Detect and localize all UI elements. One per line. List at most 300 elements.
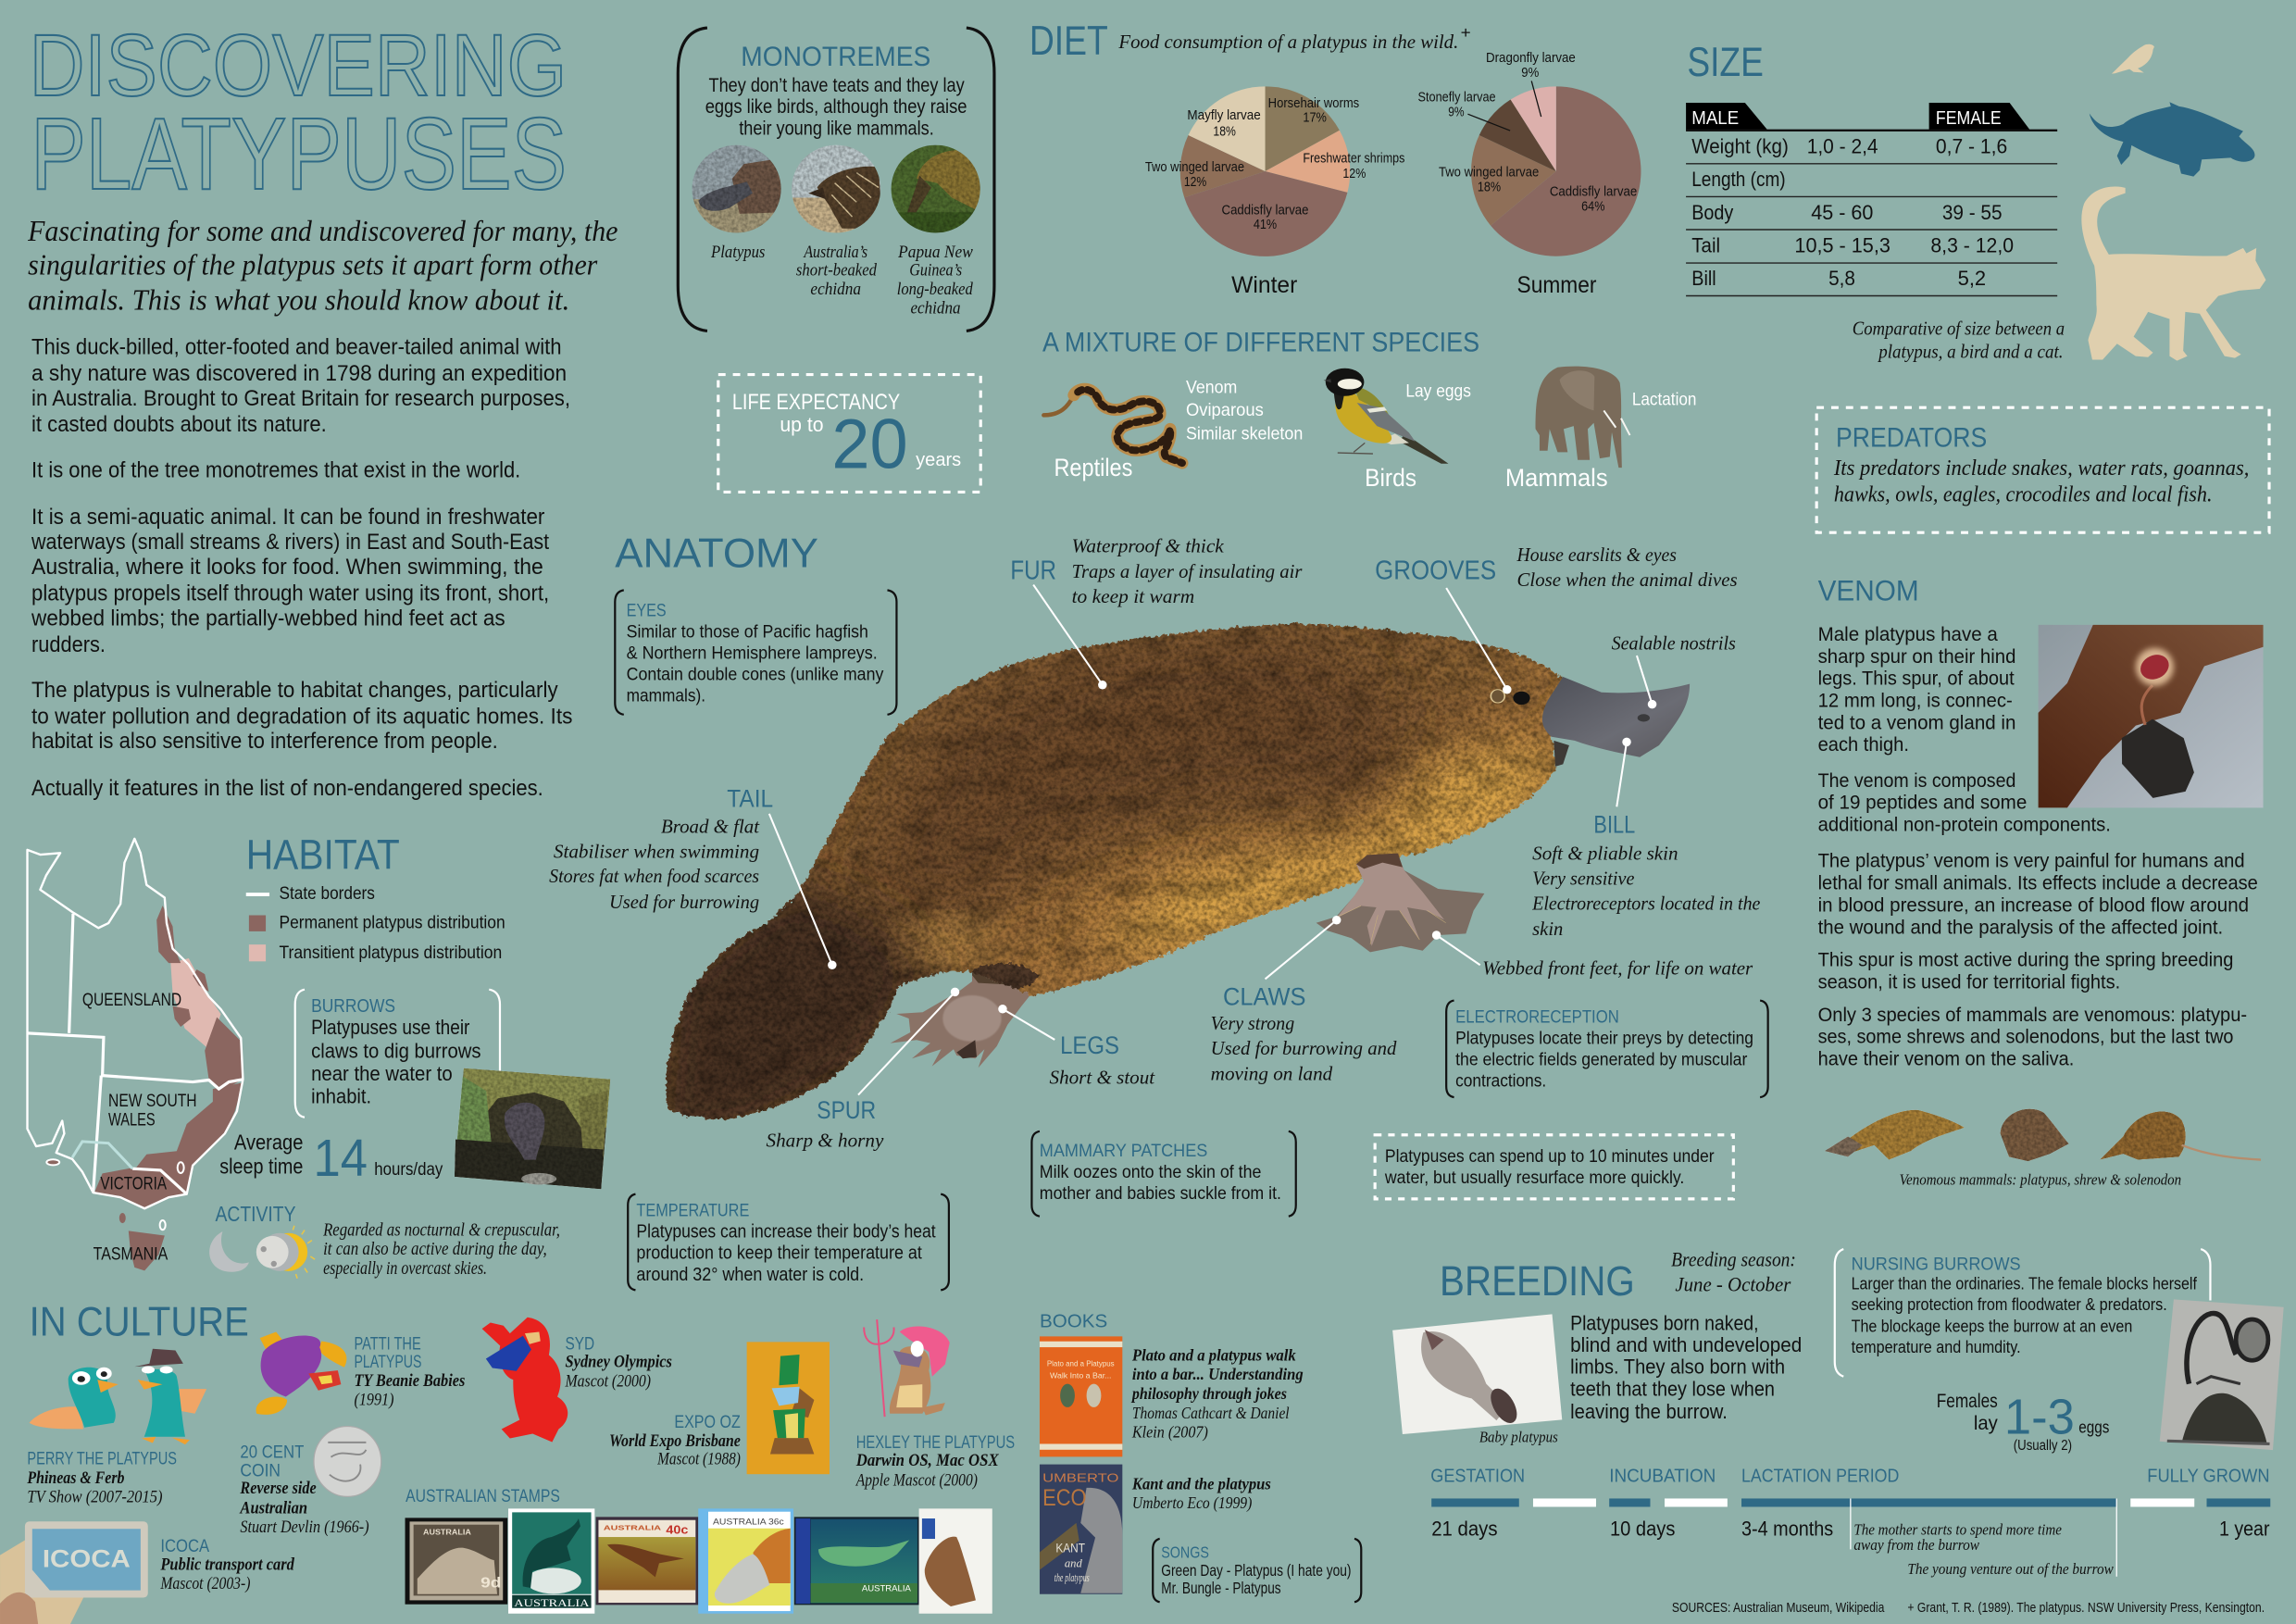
callout: predators: hawks, owls, eagles, crocodiles and local fish. — [1834, 482, 2213, 507]
pie chart: winter: 18% — [1213, 123, 1236, 139]
species: mammals: Lactation — [1632, 390, 1696, 409]
panel: venom: Only 3 species of mammals are venomous: platypu- — [1818, 1004, 2247, 1026]
illustration: venom gland and spur — [2039, 625, 2264, 807]
pie chart: winter: 17% — [1303, 109, 1327, 125]
body text: introduction: This duck-billed, otter-footed and beaver-tailed animal with — [31, 336, 562, 360]
engraving: platypus burrow — [2160, 1299, 2284, 1450]
timeline: reproduction stages: GESTATION — [1430, 1466, 1525, 1487]
pie chart: winter: Horsehair worms — [1268, 95, 1359, 111]
species captions: long-beaked — [897, 280, 973, 299]
map legend: Permanent platypus distribution — [279, 912, 505, 932]
panel: songs — [1153, 1539, 1361, 1602]
pie chart: winter: Caddisfly larvae — [1222, 202, 1309, 218]
map of eastern Australia: QUEENSLAND — [82, 991, 181, 1010]
label: legs: Short & stout — [1050, 1068, 1155, 1089]
pie chart: winter: Mayfly larvae — [1187, 107, 1261, 123]
text: breeding description: blind and with undeveloped — [1570, 1333, 1802, 1356]
panel: venom: legs. This spur, of about — [1818, 668, 2015, 690]
body text: introduction: waterways (small streams & rivers) in East and South-East — [31, 531, 549, 555]
map of eastern Australia — [28, 839, 243, 1270]
photo: platypus — [692, 145, 782, 232]
body text: introduction — [31, 336, 572, 801]
panel: eyes: Contain double cones (unlike many — [627, 664, 883, 684]
body text: introduction: It is one of the tree monotremes that exist in the world. — [31, 459, 520, 483]
culture: expo oz — [609, 1342, 830, 1474]
text: breeding description: limbs. They also born with — [1570, 1355, 1785, 1379]
intro text: singularities of the platypus sets it apart form other — [28, 249, 598, 281]
heading: breeding: Breeding season: — [1671, 1247, 1796, 1270]
book cover: kant and the platypus: KANT — [1055, 1542, 1085, 1556]
species: reptiles: Reptiles — [1054, 454, 1132, 481]
pie chart: summer: Two winged larvae — [1439, 164, 1539, 180]
species captions: short-beaked — [796, 260, 877, 280]
culture: expo oz: Mascot (1988) — [656, 1450, 741, 1469]
stat: eggs: eggs — [2078, 1418, 2109, 1436]
photo: baby platypus — [1392, 1314, 1562, 1445]
table: size: Weight (kg) — [1691, 134, 1789, 157]
timeline: reproduction stages: away from the burrow — [1853, 1536, 1979, 1554]
panel: nursing burrows: The blockage keeps the burrow at an even — [1852, 1317, 2132, 1335]
panel: venom: VENOM — [1818, 573, 1919, 606]
stamp 4 — [698, 1508, 793, 1614]
books: BOOKS — [1040, 1310, 1107, 1331]
culture: syd: Sydney Olympics — [566, 1353, 672, 1372]
stamp 5 — [794, 1517, 919, 1605]
icon: solenodon — [2100, 1111, 2186, 1160]
label: tail: Used for burrowing — [609, 893, 759, 913]
culture: perry the platypus: TV Show (2007-2015) — [27, 1488, 163, 1507]
panel: monotremes: their young like mammals. — [739, 118, 934, 140]
australian stamps: AUSTRALIAN STAMPS — [406, 1487, 560, 1506]
label: claws — [1211, 916, 1397, 1084]
books: Plato and a platypus walk — [1131, 1345, 1296, 1364]
stat: sleep time: sleep time — [219, 1154, 303, 1178]
silhouette: cat — [2081, 187, 2265, 361]
panel: eyes — [615, 590, 896, 715]
panel: mammary patches: MAMMARY PATCHES — [1040, 1142, 1207, 1161]
diet heading: DIET — [1029, 19, 1108, 64]
books: Kant and the platypus — [1131, 1474, 1271, 1493]
books: Umberto Eco (1999) — [1132, 1493, 1252, 1513]
culture: icoca card: Public transport card — [159, 1555, 294, 1574]
stamp 5: AUSTRALIA — [862, 1583, 911, 1593]
culture: patti the platypus: PATTI THE — [354, 1333, 421, 1354]
pie chart: winter: 12% — [1342, 166, 1366, 181]
stamp 1: AUSTRALIA — [423, 1528, 471, 1537]
book cover: kant and the platypus — [1040, 1465, 1122, 1594]
stat: sleep time: hours/day — [374, 1160, 443, 1180]
books — [1040, 1310, 1304, 1594]
body text: introduction: it casted doubts about its nature. — [31, 413, 327, 437]
culture: hexley the platypus: Apple Mascot (2000) — [855, 1471, 978, 1491]
panel: venom: 12 mm long, is connec- — [1818, 689, 2013, 711]
culture: 20 cent coin — [240, 1426, 381, 1537]
callout: life expectancy: up to — [780, 413, 824, 436]
culture: patti the platypus: (1991) — [354, 1391, 393, 1410]
stamp 2: AUSTRALIA — [514, 1596, 590, 1609]
panel: nursing burrows: seeking protection from floodwater & predators. — [1852, 1295, 2167, 1314]
body text: introduction: The platypus is vulnerable to habitat changes, particularly — [31, 679, 558, 703]
text: breeding description: teeth that they lose when — [1570, 1377, 1775, 1400]
panel: mammary patches: Milk oozes onto the skin of the — [1040, 1162, 1261, 1182]
intro text: animals. This is what you should know about it. — [28, 283, 569, 316]
label: tail: Broad & flat — [661, 817, 760, 837]
label: claws: moving on land — [1211, 1064, 1333, 1084]
timeline: reproduction stages: 21 days — [1431, 1517, 1498, 1540]
label: bill: skin — [1532, 919, 1563, 940]
label: tail — [549, 784, 837, 969]
callout: diving time: Platypuses can spend up to 10 minutes under — [1385, 1146, 1715, 1167]
panel: venom — [1818, 573, 2258, 1070]
label: fur: to keep it warm — [1072, 587, 1194, 607]
label: sealable nostrils: Sealable nostrils — [1612, 633, 1736, 654]
panel: nursing burrows — [1835, 1249, 2210, 1377]
panel: temperature: Platypuses can increase their body’s heat — [636, 1220, 936, 1242]
timeline: reproduction stages: 3-4 months — [1741, 1517, 1833, 1540]
culture: syd: Mascot (2000) — [565, 1371, 651, 1391]
label: webbed front feet — [1432, 931, 1753, 979]
heading: size: SIZE — [1687, 40, 1764, 85]
panel: eyes: Similar to those of Pacific hagfish — [627, 622, 868, 643]
icon: small platypus — [1825, 1110, 1965, 1160]
table: size: 5,8 — [1828, 267, 1855, 290]
icon: shrew — [2000, 1109, 2069, 1161]
map of eastern Australia: NEW SOUTH — [108, 1092, 197, 1111]
label: tail: TAIL — [727, 784, 773, 812]
table: size: MALE — [1691, 107, 1739, 129]
body text: introduction: habitat is also sensitive to interference from people. — [31, 730, 498, 754]
table: size: 1,0 - 2,4 — [1807, 134, 1878, 157]
timeline: reproduction stages: The young venture out of the burrow — [1907, 1560, 2114, 1578]
body text: introduction: It is a semi-aquatic animal. It can be found in freshwater — [31, 506, 544, 530]
panel: eyes: mammals). — [627, 686, 705, 706]
label: spur: Sharp & horny — [767, 1131, 884, 1152]
stamp 1 — [406, 1518, 507, 1605]
icon: sun and moon — [256, 1226, 315, 1279]
pie chart: summer: Caddisfly larvae — [1550, 183, 1637, 199]
sources: SOURCES: Australian Museum, Wikipedia — [1672, 1600, 1885, 1616]
heading: a mixture of different species: A MIXTURE OF DIFFERENT SPECIES — [1042, 328, 1479, 358]
panel: venom: the wound and the paralysis of the affected joint. — [1818, 916, 2223, 938]
culture: expo oz: World Expo Brisbane — [609, 1431, 741, 1451]
panel: electroreception: Platypuses locate their preys by detecting — [1455, 1028, 1753, 1048]
text: breeding description — [1570, 1312, 1802, 1423]
timeline: reproduction stages: 10 days — [1610, 1517, 1675, 1540]
pie chart: summer: Stonefly larvae — [1417, 90, 1496, 106]
rear foot — [891, 960, 1034, 1068]
panel: songs: SONGS — [1161, 1543, 1209, 1562]
label: grooves: Close when the animal dives — [1517, 570, 1738, 591]
silhouette: platypus — [2090, 102, 2254, 177]
pie chart: winter: Freshwater shrimps — [1303, 151, 1404, 167]
body text: introduction: webbed limbs; the partially-webbed hind feet act as — [31, 606, 505, 631]
panel: burrows: inhabit. — [311, 1085, 371, 1108]
map of eastern Australia: TASMANIA — [94, 1245, 168, 1265]
label: fur: Traps a layer of insulating air — [1072, 562, 1303, 582]
culture: syd — [482, 1318, 672, 1442]
panel: burrows: claws to dig burrows — [311, 1039, 481, 1062]
culture: patti the platypus: TY Beanie Babies — [354, 1371, 465, 1391]
size comparison caption — [1853, 319, 2065, 363]
pie chart: summer: Summer — [1517, 273, 1596, 298]
culture: hexley the platypus: HEXLEY THE PLATYPUS — [856, 1432, 1015, 1453]
panel: electroreception — [1446, 1001, 1768, 1097]
stat: eggs: lay — [1974, 1412, 1998, 1434]
panel: nursing burrows: NURSING BURROWS — [1852, 1255, 2021, 1275]
heading: habitat: HABITAT — [246, 831, 400, 879]
label: grooves — [1375, 545, 1738, 694]
table: size — [1686, 103, 2057, 295]
callout: diving time: water, but usually resurface more quickly. — [1384, 1168, 1684, 1188]
panel: activity — [209, 1202, 560, 1279]
label: grooves: GROOVES — [1375, 556, 1496, 585]
timeline: reproduction stages: FULLY GROWN — [2147, 1466, 2270, 1487]
book cover: plato and a platypus: Walk Into a Bar... — [1050, 1371, 1111, 1380]
timeline: reproduction stages: The mother starts to spend more time — [1853, 1521, 2062, 1539]
label: legs — [998, 1005, 1155, 1089]
panel: temperature: production to keep their temperature at — [636, 1243, 922, 1264]
species: mammals — [1505, 367, 1696, 492]
panel: eyes: & Northern Hemisphere lampreys. — [627, 643, 878, 664]
book cover: plato and a platypus — [1040, 1336, 1122, 1456]
culture: 20 cent coin: Stuart Devlin (1966-) — [240, 1518, 369, 1537]
books: Thomas Cathcart & Daniel — [1132, 1404, 1290, 1422]
panel: activity: especially in overcast skies. — [323, 1258, 487, 1279]
pie chart: summer: 18% — [1478, 179, 1501, 194]
species captions: echidna — [810, 280, 861, 299]
panel: songs: Green Day - Platypus (I hate you) — [1161, 1561, 1352, 1580]
pie chart: winter: Two winged larvae — [1145, 159, 1244, 175]
stat: eggs: 1-3 — [2004, 1389, 2075, 1444]
pie chart: summer: Dragonfly larvae — [1486, 50, 1576, 66]
map legend: State borders — [279, 883, 375, 904]
size comparison caption: platypus, a bird and a cat. — [1877, 343, 2064, 363]
stamp 3: 40c — [666, 1523, 688, 1537]
book cover: kant and the platypus: and — [1065, 1556, 1082, 1569]
table: size: 45 - 60 — [1811, 201, 1873, 224]
venomous mammals — [1825, 1109, 2261, 1189]
table: size: 39 - 55 — [1942, 201, 2003, 224]
stat: sleep time: Average — [234, 1131, 303, 1155]
diet heading: + — [1461, 23, 1471, 42]
main platypus photo — [665, 622, 1691, 1120]
timeline: reproduction stages: 1 year — [2219, 1517, 2270, 1540]
photo: short-beaked echidna — [791, 145, 881, 232]
panel: venom: The venom is composed — [1818, 769, 2015, 792]
culture: hexley the platypus: Darwin OS, Mac OSX — [855, 1451, 1000, 1470]
label: fur: FUR — [1010, 556, 1056, 585]
sources — [1672, 1600, 2265, 1616]
culture: perry the platypus: Phineas & Ferb — [27, 1468, 124, 1488]
culture: icoca card — [0, 1521, 294, 1624]
culture: 20 cent coin: Australian — [240, 1498, 307, 1518]
culture: 20 cent coin: COIN — [240, 1460, 281, 1480]
culture: icoca card: ICOCA — [43, 1544, 131, 1572]
text: breeding description: leaving the burrow. — [1570, 1400, 1728, 1423]
species captions: Australia’s — [803, 243, 867, 262]
label: bill: Soft & pliable skin — [1532, 843, 1678, 864]
table: size: Body — [1691, 201, 1734, 224]
callout: life expectancy — [718, 375, 980, 492]
title — [30, 17, 567, 211]
body text: introduction: Australia, where it looks for food. When swimming, the — [31, 556, 543, 580]
callout: diving time — [1375, 1135, 1733, 1199]
panel: venom: each thigh. — [1818, 733, 1909, 756]
panel: songs: Mr. Bungle - Platypus — [1161, 1579, 1281, 1597]
panel: temperature: TEMPERATURE — [636, 1202, 749, 1221]
label: spur: SPUR — [817, 1096, 876, 1124]
culture: 20 cent coin: Reverse side — [240, 1479, 317, 1498]
map of eastern Australia: WALES — [108, 1111, 156, 1131]
pie chart: winter — [1145, 86, 1404, 298]
map legend — [246, 883, 505, 963]
timeline: reproduction stages: LACTATION PERIOD — [1741, 1466, 1899, 1487]
stamp 1: 9d — [480, 1574, 501, 1591]
panel: monotremes: They don’t have teats and they lay — [709, 74, 965, 96]
stamp 3 — [596, 1517, 698, 1605]
callout: predators: PREDATORS — [1836, 422, 1987, 453]
pie chart: winter: Winter — [1231, 273, 1297, 298]
books: philosophy through jokes — [1130, 1384, 1287, 1403]
species: reptiles — [1043, 378, 1303, 481]
label: fur: Waterproof & thick — [1072, 537, 1225, 557]
callout: life expectancy: 20 — [831, 405, 908, 483]
body text: introduction: rudders. — [31, 633, 106, 657]
stamp 2 — [508, 1508, 594, 1614]
panel: burrows — [295, 990, 500, 1118]
culture: syd: SYD — [566, 1333, 594, 1354]
table: size: Tail — [1691, 234, 1720, 257]
pie chart: summer: 9% — [1448, 105, 1465, 120]
pie chart: summer: 64% — [1581, 198, 1604, 214]
label: tail: Stores fat when food scarces — [549, 867, 759, 887]
panel: venom: sharp spur on their hind — [1818, 645, 2015, 668]
body text: introduction: to water pollution and degradation of its aquatic homes. Its — [31, 705, 572, 729]
table: size: 8,3 - 12,0 — [1930, 234, 2014, 257]
label: bill — [1531, 738, 1760, 940]
panel: mammary patches — [1031, 1131, 1296, 1217]
intro text: Fascinating for some and undiscovered for many, the — [27, 215, 618, 247]
stamp 6 — [919, 1508, 992, 1614]
callout: predators — [1816, 407, 2269, 532]
timeline: reproduction stages: INCUBATION — [1609, 1466, 1716, 1487]
callout: predators: Its predators include snakes, water rats, goannas, — [1833, 456, 2249, 481]
icon: elephant — [1536, 367, 1630, 468]
stamp 4: AUSTRALIA 36c — [713, 1518, 784, 1527]
panel: venom: Male platypus have a — [1818, 623, 1998, 645]
intro text — [27, 215, 618, 316]
panel: venom: lethal for small animals. Its effects include a decrease — [1818, 872, 2258, 894]
diet heading — [1029, 19, 1471, 64]
platypus body — [665, 622, 1563, 1120]
panel: electroreception: the electric fields generated by muscular — [1455, 1049, 1748, 1069]
table: size: 0,7 - 1,6 — [1936, 134, 2007, 157]
venomous mammals: Venomous mammals: platypus, shrew & solenodon — [1900, 1171, 2181, 1189]
heading: breeding — [1440, 1247, 1796, 1305]
books: Klein (2007) — [1131, 1423, 1208, 1443]
label: grooves: House earslits & eyes — [1516, 545, 1677, 566]
map of eastern Australia: VICTORIA — [100, 1175, 167, 1194]
culture: hexley the platypus — [855, 1319, 1015, 1491]
label: legs: LEGS — [1060, 1031, 1119, 1059]
book cover: kant and the platypus: UMBERTO — [1042, 1472, 1119, 1485]
culture: icoca card: ICOCA — [160, 1536, 210, 1556]
australian stamps — [406, 1487, 992, 1614]
size silhouettes: bird, platypus, cat — [2081, 44, 2265, 361]
panel: nursing burrows: Larger than the ordinaries. The female blocks herself — [1852, 1274, 2198, 1293]
silhouette: bird — [2112, 44, 2154, 74]
panel: eyes: EYES — [627, 602, 667, 621]
species captions: echidna — [910, 298, 961, 318]
callout: life expectancy: years — [916, 449, 961, 470]
panel: activity: it can also be active during the day, — [323, 1239, 547, 1259]
books: into a bar... Understanding — [1132, 1365, 1304, 1383]
panel: mammary patches: mother and babies suckle from it. — [1040, 1183, 1281, 1204]
label: bill: Electroreceptors located in the — [1531, 893, 1760, 914]
label: bill: BILL — [1593, 810, 1635, 838]
book cover: plato and a platypus: Plato and a Platypus — [1047, 1360, 1115, 1368]
species: birds — [1324, 369, 1471, 492]
body text: introduction: in Australia. Brought to Great Britain for research purposes, — [31, 387, 570, 411]
pie chart: summer — [1417, 50, 1641, 298]
panel: venom: ses, some shrews and solenodons, but the last two — [1818, 1026, 2233, 1048]
species: reptiles: Venom — [1186, 378, 1237, 397]
platypus bill — [1542, 677, 1690, 757]
pie chart: winter: 41% — [1254, 217, 1277, 232]
body text: introduction: platypus propels itself through water using its front, short, — [31, 581, 549, 606]
heading: breeding: June - October — [1675, 1272, 1791, 1295]
panel: monotremes: MONOTREMES — [741, 42, 930, 72]
heading: in culture: IN CULTURE — [30, 1299, 249, 1344]
front foot — [1316, 854, 1484, 952]
stamp 3: AUSTRALIA — [604, 1525, 661, 1531]
culture: patti the platypus — [256, 1331, 465, 1415]
label: tail: Stabiliser when swimming — [554, 842, 759, 862]
pie chart: summer: 9% — [1521, 65, 1539, 81]
panel: venom: additional non-protein components. — [1818, 814, 2111, 836]
body text: introduction: Actually it features in the list of non-endangered species. — [31, 777, 543, 801]
photo: platypus at burrow — [455, 1068, 610, 1189]
label: webbed front feet: Webbed front feet, for life on water — [1482, 958, 1753, 979]
label: spur — [767, 988, 959, 1152]
label: claws: CLAWS — [1223, 983, 1305, 1011]
table: size: 5,2 — [1958, 267, 1986, 290]
book cover: kant and the platypus: the platypus — [1054, 1571, 1090, 1584]
title: PLATYPUSES — [31, 97, 567, 211]
panel: venom: season, it is used for territorial fights. — [1818, 970, 2120, 993]
panel: burrows: Platypuses use their — [311, 1016, 469, 1039]
text: breeding description: Platypuses born naked, — [1570, 1312, 1759, 1335]
callout: life expectancy: LIFE EXPECTANCY — [732, 391, 900, 415]
table: size: Length (cm) — [1691, 168, 1786, 191]
species captions — [710, 243, 973, 318]
culture: icoca card: Mascot (2003-) — [160, 1574, 250, 1593]
photo: baby platypus: Baby platypus — [1479, 1428, 1558, 1445]
stat: eggs: Females — [1937, 1390, 1998, 1412]
species: birds: Birds — [1365, 464, 1416, 492]
culture: patti the platypus: PLATYPUS — [354, 1352, 422, 1372]
panel: activity: Regarded as nocturnal & crepuscular, — [322, 1220, 560, 1241]
panel: venom: of 19 peptides and some — [1818, 792, 2027, 814]
label: claws: Very strong — [1211, 1014, 1294, 1034]
table: size: FEMALE — [1936, 107, 2002, 129]
panel: temperature: around 32° when water is cold. — [636, 1264, 864, 1285]
label: fur — [1010, 537, 1303, 689]
panel: temperature — [628, 1194, 949, 1290]
species: reptiles: Similar skeleton — [1186, 424, 1303, 443]
culture: expo oz: EXPO OZ — [674, 1412, 741, 1432]
species: reptiles: Oviparous — [1186, 401, 1264, 420]
